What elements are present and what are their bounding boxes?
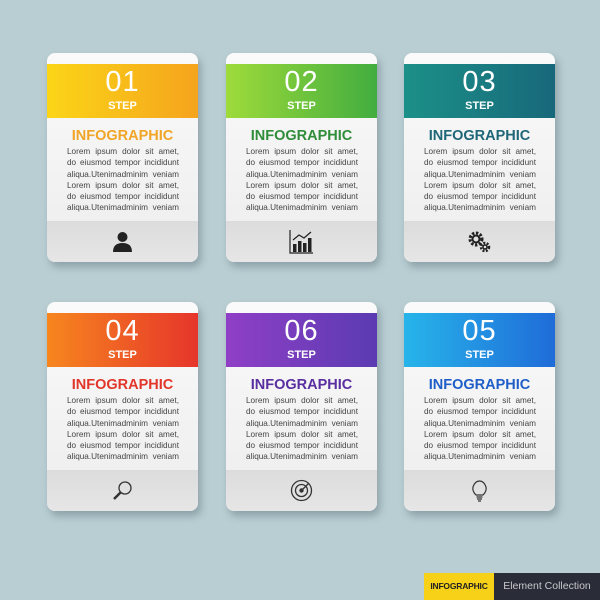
- text 02: Lorem ipsum dolor sit amet, do eiusmod tempor incididunt aliqua.Utenimadminim veniam Lorem ipsum dolor sit amet, do eiusmod tempor incididunt aliqua.Utenimadminim veniam: [246, 147, 358, 212]
- text 03: Lorem ipsum dolor sit amet, do eiusmod tempor incididunt aliqua.Utenimadminim veniam Lorem ipsum dolor sit amet, do eiusmod tempor incididunt aliqua.Utenimadminim veniam: [424, 147, 536, 212]
- header 04: 04: [105, 315, 140, 347]
- card 06: [226, 302, 377, 511]
- header 06: [226, 313, 377, 367]
- icon: person: [113, 232, 132, 252]
- footer 03: [404, 221, 555, 262]
- footer 05: [404, 470, 555, 511]
- footer 02: [226, 221, 377, 262]
- header 04: STEP: [108, 349, 137, 361]
- title 01: INFOGRAPHIC: [72, 128, 173, 144]
- title 02: INFOGRAPHIC: [251, 128, 352, 144]
- header 03: STEP: [465, 100, 494, 112]
- icon: bar chart: [289, 230, 313, 254]
- title 06: INFOGRAPHIC: [251, 377, 352, 393]
- header 01: [47, 64, 198, 118]
- header 02: [226, 64, 377, 118]
- card 02: [226, 53, 377, 262]
- header 02: STEP: [287, 100, 316, 112]
- icon: target: [290, 480, 312, 502]
- icon: magnifier: [113, 481, 132, 500]
- text 04: Lorem ipsum dolor sit amet, do eiusmod tempor incididunt aliqua.Utenimadminim veniam Lorem ipsum dolor sit amet, do eiusmod tempor incididunt aliqua.Utenimadminim veniam: [67, 396, 179, 461]
- header 06: STEP: [287, 349, 316, 361]
- text 06: Lorem ipsum dolor sit amet, do eiusmod tempor incididunt aliqua.Utenimadminim veniam Lorem ipsum dolor sit amet, do eiusmod tempor incididunt aliqua.Utenimadminim veniam: [246, 396, 358, 461]
- card 03: [404, 53, 555, 262]
- header 05: STEP: [465, 349, 494, 361]
- header 06: 06: [284, 315, 319, 347]
- bottom badge: INFOGRAPHIC: [430, 581, 488, 591]
- header 05: 05: [462, 315, 497, 347]
- footer 04: [47, 470, 198, 511]
- card 05: [404, 302, 555, 511]
- title 05: INFOGRAPHIC: [429, 377, 530, 393]
- header 04: [47, 313, 198, 367]
- header 01: 01: [105, 66, 140, 98]
- header 01: STEP: [108, 100, 137, 112]
- footer 06: [226, 470, 377, 511]
- icon: light bulb: [472, 480, 487, 502]
- header 02: 02: [284, 66, 319, 98]
- header 03: [404, 64, 555, 118]
- bottom badge: [424, 573, 600, 600]
- title 04: INFOGRAPHIC: [72, 377, 173, 393]
- header 03: 03: [462, 66, 497, 98]
- text 05: Lorem ipsum dolor sit amet, do eiusmod tempor incididunt aliqua.Utenimadminim veniam Lorem ipsum dolor sit amet, do eiusmod tempor incididunt aliqua.Utenimadminim veniam: [424, 396, 536, 461]
- title 03: INFOGRAPHIC: [429, 128, 530, 144]
- card 01: [47, 53, 198, 262]
- icon: gears: [468, 232, 490, 252]
- text 01: Lorem ipsum dolor sit amet, do eiusmod tempor incididunt aliqua.Utenimadminim veniam Lorem ipsum dolor sit amet, do eiusmod tempor incididunt aliqua.Utenimadminim veniam: [67, 147, 179, 212]
- bottom badge: Element Collection: [503, 580, 591, 592]
- footer 01: [47, 221, 198, 262]
- header 05: [404, 313, 555, 367]
- card 04: [47, 302, 198, 511]
